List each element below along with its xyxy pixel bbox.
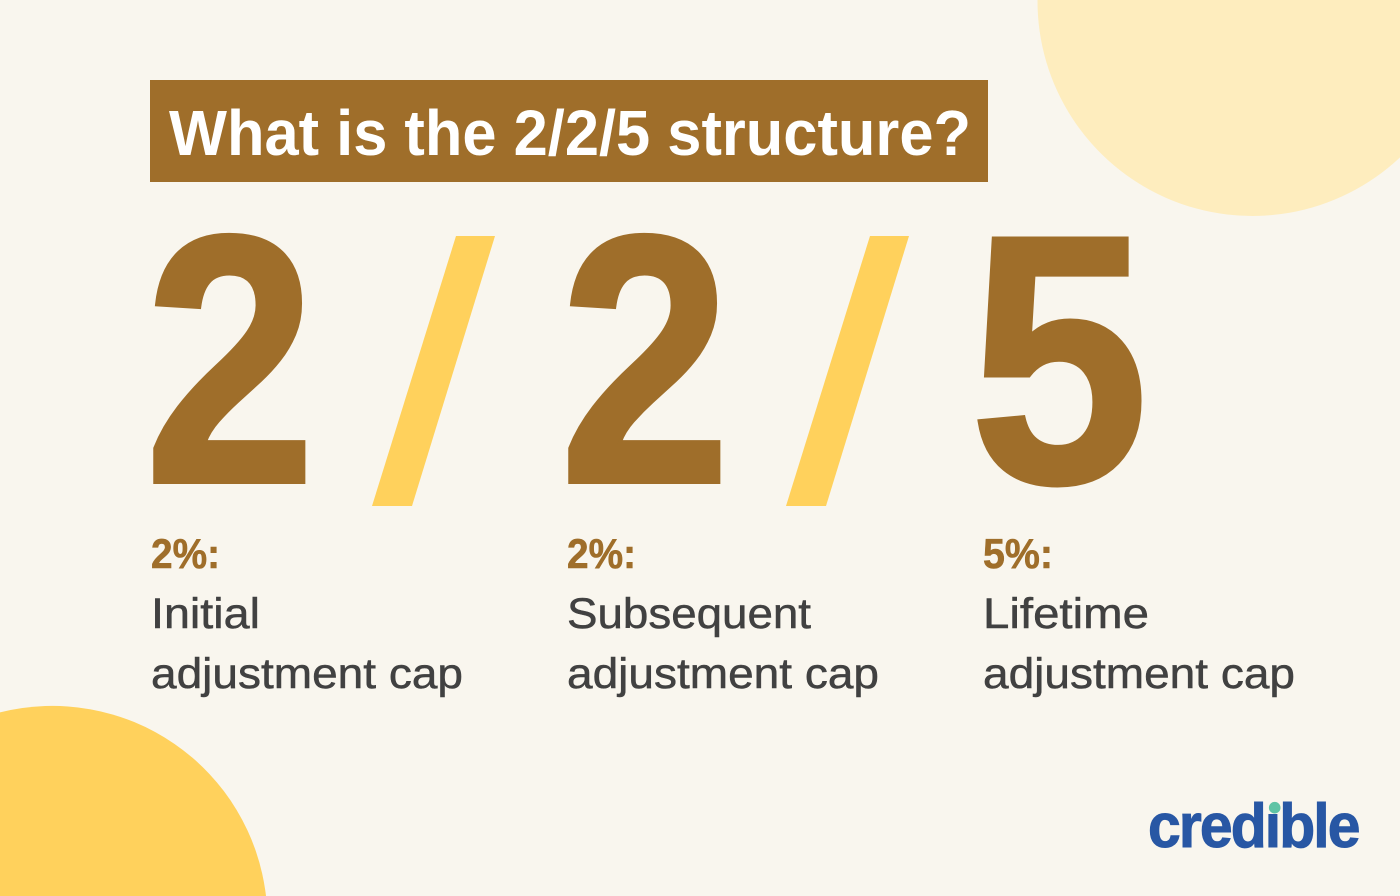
decorative circle bottom left [0, 706, 266, 896]
slash 2 [786, 236, 909, 506]
big digit 2: 2 [144, 162, 316, 558]
caption 3: 5%: [983, 530, 1053, 577]
decorative circle top right [1037, 0, 1400, 216]
caption 3 [983, 530, 1295, 698]
title banner [150, 80, 988, 182]
caption 3: Lifetime [983, 590, 1149, 638]
caption 1: 2%: [151, 530, 220, 577]
big digit 2 second: 2 [559, 162, 731, 558]
caption 3: adjustment cap [983, 650, 1295, 698]
big digit 5: 5 [970, 162, 1149, 557]
caption 1 [151, 530, 463, 698]
caption 2: Subsequent [567, 590, 811, 638]
caption 2: adjustment cap [567, 650, 879, 698]
caption 2: 2%: [567, 530, 636, 577]
caption 1: adjustment cap [151, 650, 463, 698]
slash 1 [372, 236, 495, 506]
caption 2 [567, 530, 879, 698]
logo: credible: credible [1148, 791, 1359, 860]
title banner: What is the 2/2/5 structure? [169, 97, 971, 169]
caption 1: Initial [151, 590, 260, 638]
